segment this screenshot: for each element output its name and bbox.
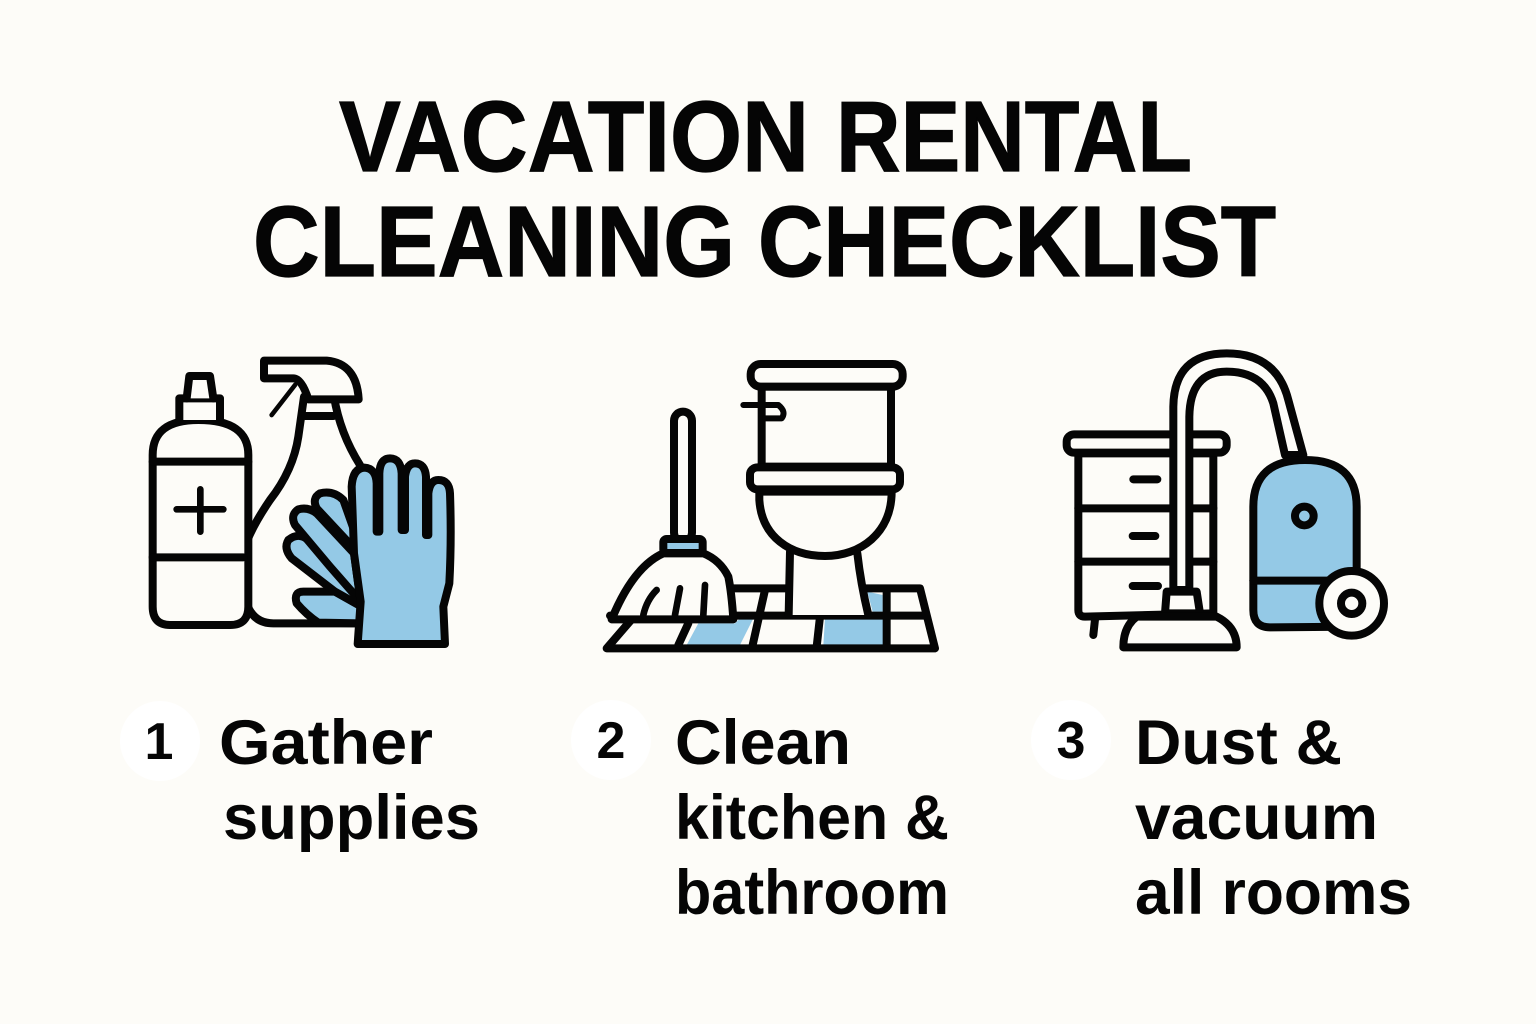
step 2 label: kitchen & [675,783,949,853]
icon: cleaning supplies [153,361,451,644]
step 3 label: Dust & [1135,708,1342,778]
number badge 3 [1031,700,1111,780]
number badge 2: 2 [597,712,625,770]
step 3 label: vacuum [1135,783,1378,853]
step 2 [571,700,949,928]
number badge 2 [571,700,651,780]
step 3 [1031,700,1412,928]
step 1 [120,701,480,853]
title: CHECKLIST [758,186,1276,298]
number badge 1: 1 [145,713,173,771]
title: RENTAL [836,81,1192,193]
title: CLEANING [253,186,735,298]
glove [286,458,451,644]
step 3 label [1135,708,1412,928]
toilet [743,364,903,615]
step 2 label [675,708,949,928]
broom [612,412,733,619]
spray bottle [241,361,370,623]
sanitizer bottle [153,376,248,625]
step 2 label: Clean [675,708,851,778]
step 1 label: Gather [219,708,433,778]
step 2 label: bathroom [675,858,949,928]
number badge 1 [120,701,200,781]
step 1 label [219,708,480,853]
icon: toilet, broom and tiles [607,364,935,648]
floor tiles [607,588,935,648]
vacuum head [1123,592,1237,647]
icon: dresser and vacuum [1067,353,1384,647]
dresser [1067,434,1227,635]
vacuum hose [1173,353,1303,590]
step 3 label: all rooms [1135,858,1412,928]
title: VACATION [339,81,809,193]
number badge 3: 3 [1057,712,1085,770]
title [253,81,1276,298]
vacuum wheel [1319,571,1384,636]
vacuum body [1253,460,1357,627]
step 1 label: supplies [223,783,480,853]
